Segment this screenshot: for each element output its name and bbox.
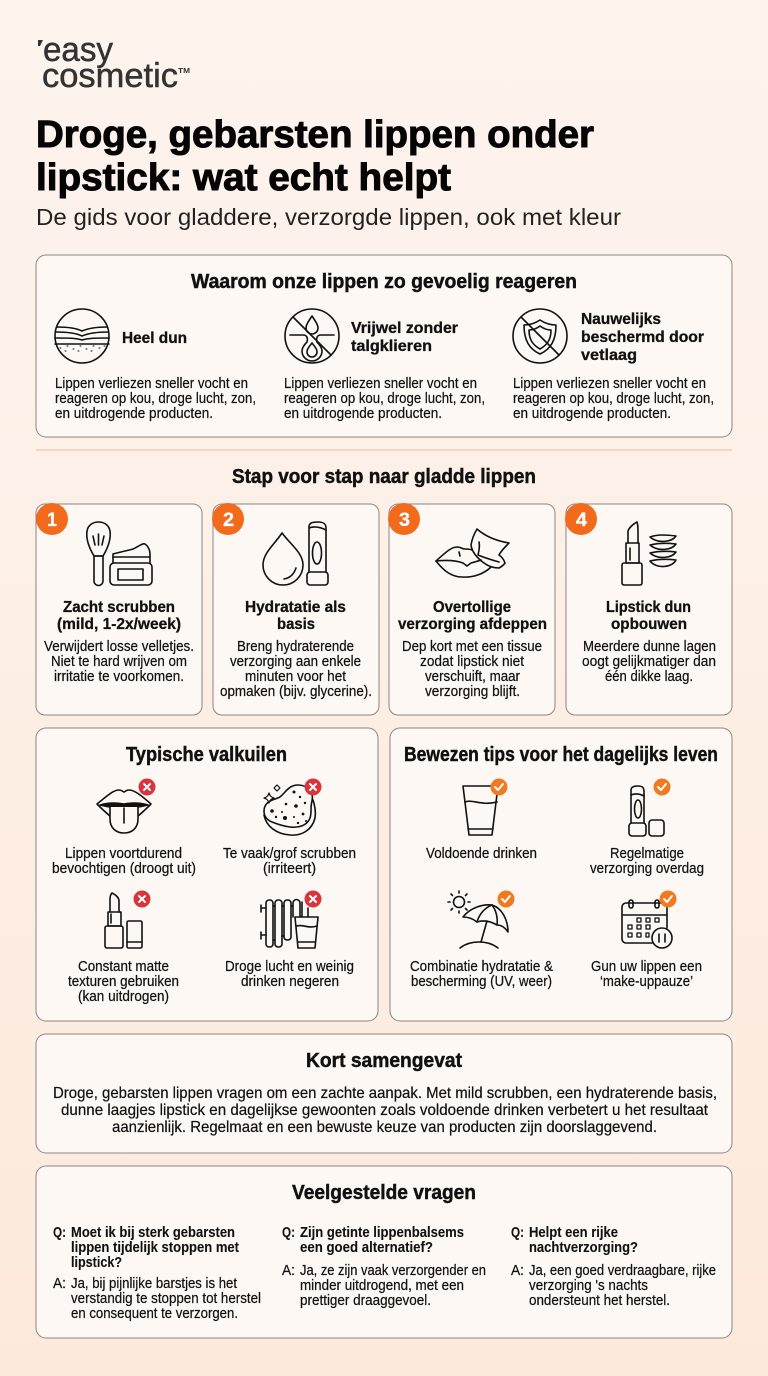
text: bevochtigen [52, 846, 196, 877]
text: nauwelijks beschermd door vetlaag [581, 311, 704, 364]
icon: brush and cream jar [87, 522, 152, 586]
text: stap 3 uitleg [402, 639, 542, 700]
text: stap 4 uitleg [582, 639, 716, 685]
text: talgklieren uitleg: reageren op kou, droge lucht, zon, [284, 391, 485, 407]
text: voldoende drinken: Voldoende drinken [426, 846, 537, 862]
text: matte texturen [68, 959, 179, 1005]
logo: easy cosmetic: cosmetic [42, 57, 178, 95]
panel: stap 1 [36, 503, 202, 715]
badge: check 1 [490, 778, 508, 796]
heading: veelgestelde vragen: Veelgestelde vragen [292, 1182, 476, 1204]
badge: fout 3 [134, 890, 150, 908]
text: stap 4 uitleg: Meerdere dunne lagen [583, 639, 716, 655]
faq 1: Moet ik bij sterk gebarsten [71, 1224, 235, 1241]
badge: 2: 2 [223, 510, 234, 531]
title: lipstick: wat echt helpt [36, 157, 451, 199]
text: stap 2 uitleg: minuten voor het [245, 669, 346, 685]
faq 1: lipstick? [71, 1254, 122, 1271]
icon: mouth with tongue [97, 790, 151, 833]
text: bevochtigen: Lippen voortdurend [65, 846, 182, 862]
text: talgklieren uitleg [284, 376, 485, 422]
badge: fout 4 [304, 890, 322, 908]
panel: stap 2 [212, 503, 379, 715]
icon: matte lipstick and cap [105, 893, 142, 948]
badge: 2 [212, 503, 244, 535]
text: vetlaag uitleg: en uitdrogende producten. [513, 406, 671, 422]
text: heel dun uitleg: en uitdrogende producten. [55, 406, 213, 422]
text: stap 2 uitleg: opmaken (bijv. glycerine). [220, 684, 372, 700]
text: overtollige verzorging afdeppen: verzorging afdeppen [398, 616, 547, 633]
faq 2: A: [282, 1263, 295, 1279]
text: stap 3 uitleg: verschuift, maar [425, 669, 520, 685]
badge: fout 2 [304, 778, 322, 796]
faq 3: Helpt een rijke [529, 1224, 618, 1241]
icon: crossed shield [513, 309, 567, 363]
text: lipstick dun opbouwen: Lipstick dun [606, 599, 691, 616]
heading: bewezen tips: Bewezen tips voor het dagelijks leven [404, 744, 718, 766]
text: combinatie hydratatie: bescherming (UV, weer) [411, 974, 552, 990]
text: stap 4 uitleg: oogt gelijkmatiger dan [582, 654, 716, 670]
text: stap 3 uitleg: zodat lipstick niet [420, 654, 524, 670]
text: vrijwel zonder talgklieren [351, 320, 458, 355]
badge: 3: 3 [399, 510, 410, 531]
logo: easy cosmetic: TM [178, 68, 190, 75]
text: overtollige verzorging afdeppen: Overtollige [433, 599, 511, 616]
text: droge lucht: drinken negeren [241, 974, 339, 990]
faq 1: Ja, bij pijnlijke barstjes is het [71, 1276, 237, 1292]
heading: stap voor stap: Stap voor stap naar gladde lippen [232, 466, 536, 488]
faq 1: lippen tijdelijk stoppen met [71, 1239, 239, 1256]
icon: balm and small box [629, 786, 664, 836]
faq 3 [511, 1224, 716, 1309]
text: stap 2 uitleg: Breng hydraterende [237, 639, 354, 655]
icon: lipstick and swatches [622, 522, 676, 585]
icon: drop and balm [263, 522, 328, 585]
icon: radiator and water glass [261, 899, 318, 948]
text: talgklieren uitleg: Lippen verliezen sneller vocht en [284, 376, 477, 392]
text: talgklieren uitleg: en uitdrogende producten. [284, 406, 442, 422]
subtitle: De gids voor gladdere, verzorgde lippen, ook met kleur [36, 204, 621, 230]
text: regelmatige verzorging [590, 846, 704, 877]
faq 3: A: [511, 1263, 524, 1279]
text: droge lucht: Droge lucht en weinig [225, 959, 354, 975]
badge: check 4 [660, 890, 676, 908]
panel: stap 4 [565, 503, 732, 715]
faq 1: A: [53, 1276, 66, 1292]
text: scrubben [223, 846, 356, 877]
icon: no sebaceous glands [285, 309, 339, 363]
text: combinatie hydratatie [410, 959, 553, 990]
faq 2: minder uitdrogend, met een [300, 1278, 464, 1294]
logo: easy cosmetic [38, 31, 190, 95]
text: hydratatie als basis [245, 599, 346, 633]
badge: 4: 4 [576, 510, 587, 531]
text: combinatie hydratatie: Combinatie hydratatie & [410, 959, 553, 975]
faq 1: en consequent te verzorgen. [71, 1306, 238, 1322]
text: vrijwel zonder talgklieren: Vrijwel zonder [351, 320, 458, 337]
text: matte texturen: (kan uitdrogen) [78, 989, 169, 1005]
heading: kort samengevat: Kort samengevat [306, 1050, 462, 1072]
text: heel dun: Heel dun [122, 330, 187, 347]
faq 2: een goed alternatief? [300, 1239, 433, 1256]
text: stap 1 uitleg: Niet te hard wrijven om [51, 654, 187, 670]
panel: kort samengevat [36, 1034, 732, 1153]
faq 2: prettiger draaggevoel. [300, 1293, 431, 1309]
badge: check 3 [498, 890, 514, 908]
text: nauwelijks beschermd door vetlaag: vetlaag [581, 347, 637, 364]
text: lipstick dun opbouwen: opbouwen [611, 616, 687, 633]
faq 1: verstandig te stoppen tot herstel [71, 1291, 261, 1307]
text: overtollige verzorging afdeppen [398, 599, 547, 633]
faq 3: Ja, een goed verdraagbare, rijke [529, 1263, 716, 1279]
badge: fout 1 [138, 778, 156, 796]
text: vrijwel zonder talgklieren: talgklieren [351, 338, 432, 355]
heading: waarom: Waarom onze lippen zo gevoelig reageren [191, 271, 577, 293]
text: make-uppauze: ‘make-uppauze’ [600, 974, 693, 990]
text: stap 4 uitleg: één dikke laag. [605, 669, 693, 685]
badge: 1: 1 [47, 510, 57, 531]
text: samenvatting [53, 1085, 717, 1136]
title: Droge, gebarsten lippen onder [36, 114, 594, 156]
icon: sun and beach umbrella [448, 891, 508, 948]
text: stap 2 uitleg: verzorging aan enkele [230, 654, 361, 670]
icon: calendar with pause [622, 900, 672, 948]
text: zacht scrubben: (mild, 1-2x/week) [57, 616, 181, 633]
text: heel dun uitleg [55, 376, 256, 422]
faq 3: verzorging 's nachts [529, 1278, 648, 1294]
text: nauwelijks beschermd door vetlaag: Nauwelijks [581, 311, 661, 328]
title [36, 114, 594, 199]
text: stap 3 uitleg: Dep kort met een tissue [402, 639, 542, 655]
text: lipstick dun opbouwen [606, 599, 691, 633]
faq 3: Q: [511, 1224, 524, 1241]
faq 3: ondersteunt het herstel. [529, 1293, 670, 1309]
text: stap 2 uitleg [220, 639, 372, 700]
badge: 3 [388, 503, 420, 535]
text: vetlaag uitleg [513, 376, 714, 422]
text: droge lucht [225, 959, 354, 990]
text: regelmatige verzorging: verzorging overdag [590, 861, 704, 877]
text: samenvatting: dunne laagjes lipstick en dagelijkse gewoonten zoals voldoende drinken verbetert u het resultaat [61, 1102, 709, 1119]
panel: bewezen tips [390, 728, 732, 1021]
text: stap 3 uitleg: verzorging blijft. [425, 684, 520, 700]
faq 2: Q: [282, 1224, 295, 1241]
panel: stap 3 [388, 503, 555, 715]
text: heel dun uitleg: Lippen verliezen sneller vocht en [55, 376, 248, 392]
text: stap 1 uitleg [44, 639, 194, 685]
faq 1 [53, 1224, 261, 1322]
faq 2 [282, 1224, 486, 1309]
badge: 1 [36, 503, 68, 535]
text: zacht scrubben: Zacht scrubben [63, 599, 175, 616]
text: zacht scrubben [57, 599, 181, 633]
text: matte texturen: Constant matte [78, 959, 169, 975]
text: vetlaag uitleg: reageren op kou, droge lucht, zon, [513, 391, 714, 407]
logo: easy cosmetic: easy [43, 31, 113, 69]
icon: glass of water [463, 786, 498, 835]
text: stap 1 uitleg: irritatie te voorkomen. [54, 669, 184, 685]
panel: waarom onze lippen zo gevoelig reageren [36, 255, 732, 437]
faq 2: Ja, ze zijn vaak verzorgender en [300, 1263, 486, 1279]
text: scrubben: (irriteert) [263, 861, 316, 877]
text: samenvatting: Droge, gebarsten lippen vragen om een zachte aanpak. Met mild scrubben, een hydraterende basis, [53, 1085, 717, 1102]
text: make-uppauze: Gun uw lippen een [591, 959, 702, 975]
icon: lips and tissue [436, 529, 509, 577]
text: scrubben: Te vaak/grof scrubben [223, 846, 356, 862]
text: regelmatige verzorging: Regelmatige [610, 846, 684, 862]
panel: typische valkuilen [36, 728, 378, 1021]
icon: thin skin layers [55, 309, 109, 363]
text: hydratatie als basis: Hydratatie als [245, 599, 346, 616]
faq 3: nachtverzorging? [529, 1239, 638, 1256]
text: matte texturen: texturen gebruiken [68, 974, 179, 990]
icon: sponge [264, 785, 315, 835]
badge: 4 [565, 503, 597, 535]
faq 2: Zijn getinte lippenbalsems [300, 1224, 464, 1241]
text: hydratatie als basis: basis [277, 616, 315, 633]
panel: veelgestelde vragen [36, 1166, 732, 1338]
text: bevochtigen: bevochtigen (droogt uit) [52, 861, 196, 877]
text: nauwelijks beschermd door vetlaag: beschermd door [581, 329, 704, 346]
badge: check 2 [654, 778, 670, 796]
text: stap 1 uitleg: Verwijdert losse velletjes. [44, 639, 194, 655]
text: vetlaag uitleg: Lippen verliezen sneller vocht en [513, 376, 706, 392]
text: samenvatting: aanzienlijk. Regelmaat en een bewuste keuze van producten zijn doorslaggevend. [112, 1119, 657, 1136]
text: make-uppauze [591, 959, 702, 990]
text: heel dun uitleg: reageren op kou, droge lucht, zon, [55, 391, 256, 407]
faq 1: Q: [53, 1224, 66, 1241]
heading: typische valkuilen: Typische valkuilen [126, 744, 287, 766]
